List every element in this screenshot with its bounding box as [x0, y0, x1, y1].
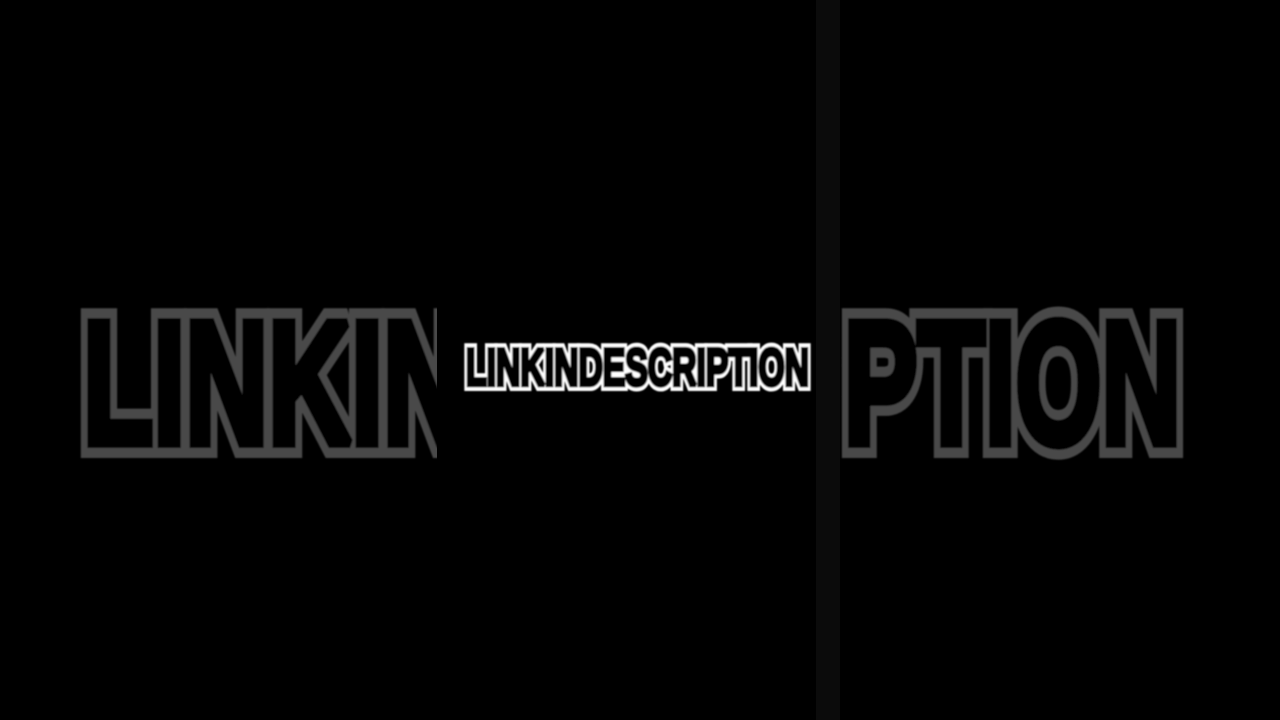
large outlined text left: LINKIN: LINKIN: [83, 285, 466, 480]
large outlined text left: LINKIN: LINKIN: [83, 285, 466, 480]
center title: LINK IN DESCRIPTION: LINKINDESCRIPTION: [466, 339, 809, 397]
large outlined text left: LINKIN: [80, 307, 437, 459]
center title: LINK IN DESCRIPTION: [466, 339, 809, 397]
center title: LINK IN DESCRIPTION: LINKINDESCRIPTION: [466, 339, 809, 397]
